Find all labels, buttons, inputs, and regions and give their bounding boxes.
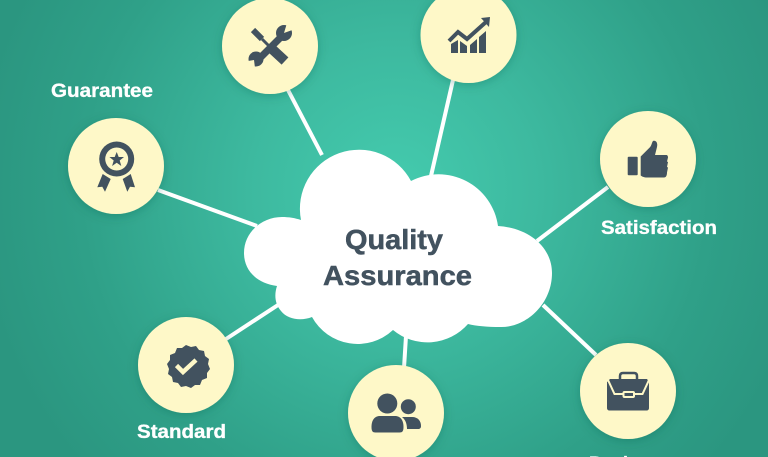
icon: wrench and screwdriver bbox=[248, 23, 295, 68]
cloud title: Quality bbox=[345, 224, 443, 255]
label: Standard: Standard bbox=[137, 422, 226, 443]
label: Guarantee: Guarantee bbox=[51, 81, 153, 102]
node: growth chart bbox=[420, 0, 516, 83]
icon: briefcase bbox=[607, 373, 649, 410]
connector lines bbox=[158, 80, 608, 368]
icon: verified check badge bbox=[167, 345, 210, 388]
icon: award badge bbox=[97, 142, 135, 192]
central cloud bbox=[244, 150, 552, 344]
node: satisfaction bbox=[600, 111, 717, 239]
node: tools bbox=[222, 0, 318, 94]
node: business bbox=[580, 343, 676, 457]
icon: two people bbox=[372, 394, 421, 432]
icon: thumbs up bbox=[628, 141, 668, 178]
cloud title: Assurance bbox=[323, 260, 472, 291]
cloud title bbox=[323, 224, 472, 291]
icon: rising bar chart bbox=[449, 17, 490, 53]
node: guarantee bbox=[51, 81, 164, 214]
label: Satisfaction: Satisfaction bbox=[601, 218, 717, 239]
node: people bbox=[348, 365, 444, 457]
node: standard bbox=[137, 317, 234, 443]
